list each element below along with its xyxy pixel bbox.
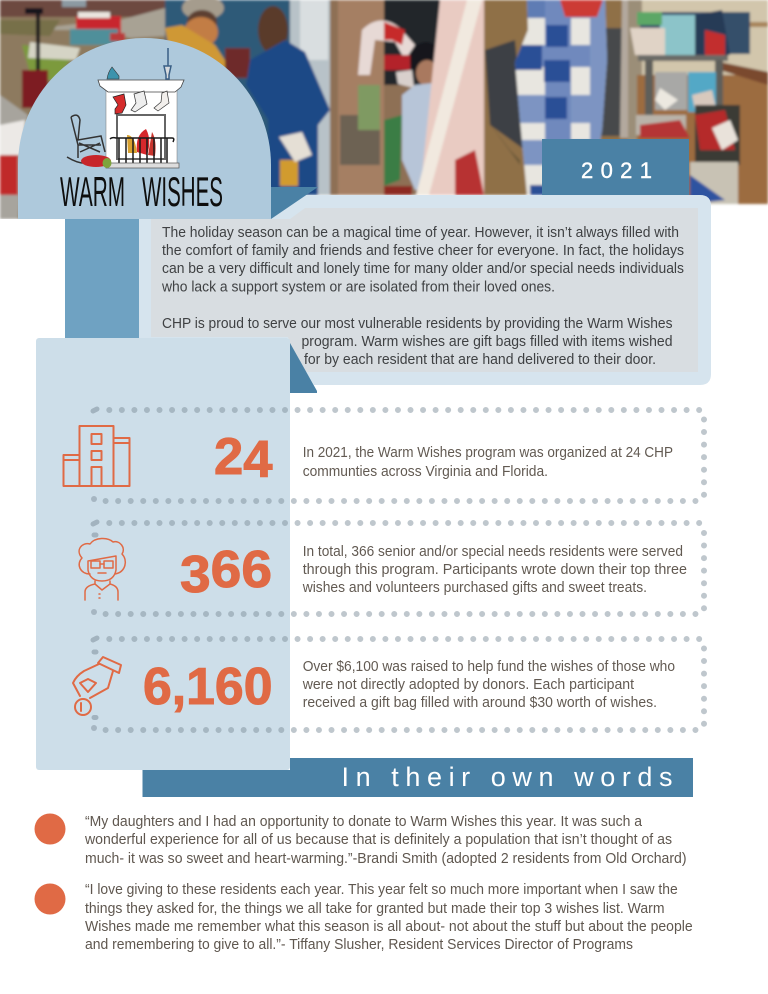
- number: 366: 66: [211, 541, 272, 599]
- text: intro paragraphs: program. Warm wishes are gift bags filled with items wished: [302, 334, 672, 350]
- panel: logo arch: [18, 38, 271, 219]
- quote: Tiffany Slusher: [34, 882, 693, 953]
- fold: top blue corner: [271, 187, 318, 219]
- icon: senior resident: [79, 538, 125, 600]
- stat row: funds raised: [73, 638, 704, 731]
- panel: intro callout background: [139, 195, 711, 385]
- text: funds description: received a gift bag filled with around $30 worth of wishes.: [303, 695, 657, 711]
- icon: buildings: [64, 426, 130, 486]
- icon: hand dropping coin: [73, 657, 121, 715]
- quote text: [85, 882, 693, 953]
- text: residents description: [302, 544, 687, 596]
- logo: fireplace illustration: [67, 48, 184, 168]
- text: residents description: through this program. Participants wrote down their top three: [303, 562, 687, 578]
- heading band: In their own words: [142, 758, 693, 797]
- wrapped gift: [81, 155, 112, 168]
- photo: plaid sock in box: [484, 0, 628, 197]
- quote text: Wishes made me remember what this season is all about- not about the stuff but about the people: [85, 919, 693, 935]
- fire grate: [110, 138, 174, 164]
- panel: blue side block: [65, 219, 139, 339]
- quote text: much- it was so sweet and heart-warming.”-Brandi Smith (adopted 2 residents from Old Orchard): [85, 851, 686, 867]
- text: funds description: were not directly adopted by donors. Each participant: [302, 677, 634, 693]
- quote text: “I love giving to these residents each year. This year felt so much more important when I saw the: [85, 882, 678, 898]
- quote text: [84, 814, 686, 867]
- quote text: and remembering to give to all.”- Tiffany Slusher, Resident Services Director of Programs: [85, 937, 633, 953]
- number: 24: 2: [214, 428, 243, 486]
- text: intro paragraphs: for by each resident that are hand delivered to their door.: [304, 352, 656, 368]
- text: intro paragraphs: who lack a support system or are isolated from their loved ones.: [161, 280, 555, 296]
- badge: year 2021: 2021: [581, 158, 652, 183]
- panel: intro inner grey box: [151, 208, 698, 372]
- number: 366: 3: [180, 546, 211, 604]
- number: 6,160: 6,160: [143, 658, 272, 716]
- stat row: residents: [79, 522, 704, 615]
- hearth base: [106, 163, 179, 168]
- text: funds description: [302, 659, 675, 711]
- text: funds description: Over $6,100 was raised to help fund the wishes of those who: [303, 659, 675, 675]
- heading band: In their own words: In their own words: [342, 762, 672, 792]
- dotted frame: [91, 409, 704, 502]
- text: WISHES: [142, 168, 223, 215]
- text: intro paragraphs: can be a very difficult and lonely time for many older and/or special needs individuals: [162, 261, 684, 277]
- number: 24: 4: [243, 431, 273, 489]
- dotted frame: [91, 638, 704, 731]
- text: intro paragraphs: CHP is proud to serve our most vulnerable residents by providing the Warm Wishes: [162, 316, 672, 332]
- text: intro paragraphs: the comfort of family and friends and festive cheer for everyone. In fact, the holidays: [162, 243, 684, 259]
- text: residents description: In total, 366 senior and/or special needs residents were served: [303, 544, 683, 560]
- photo: yard and residents at door: [0, 0, 338, 219]
- dotted frame: [91, 522, 704, 615]
- text: communities description: [303, 445, 673, 480]
- stockings: [113, 91, 169, 114]
- badge: year 2021: [542, 139, 689, 195]
- stat row: communities: [64, 409, 704, 502]
- photo: table of gift bags: [628, 0, 768, 204]
- candle: [164, 48, 171, 79]
- quote text: wonderful experience for all of us because that is definitely a population that isn’t thought of as: [84, 832, 672, 848]
- quote: Brandi Smith: [34, 814, 686, 867]
- text: communities description: communties across Virginia and Florida.: [303, 464, 548, 480]
- hearth frame: [117, 115, 165, 159]
- text: communities description: In 2021, the Warm Wishes program was organized at 24 CHP: [303, 445, 673, 461]
- flames: [127, 129, 156, 156]
- bullet: [34, 884, 66, 914]
- rocking chair: [67, 115, 105, 163]
- text: residents description: wishes and volunteers purchased gifts and sweet treats.: [302, 580, 647, 596]
- fireplace body: [106, 84, 177, 166]
- photo strip: [0, 0, 768, 219]
- fold: lower blue corner: [290, 343, 317, 393]
- logo: Warm Wishes wordmark: WARM: [60, 168, 125, 215]
- bullet: [34, 814, 66, 844]
- quote text: “My daughters and I had an opportunity to donate to Warm Wishes this year. It was such a: [85, 814, 643, 830]
- quote text: things they asked for, the things we all take for granted but made their top 3 wishes list. Warm: [85, 901, 664, 917]
- photo: woman with gift bag: [330, 0, 484, 195]
- text: intro paragraphs: [161, 225, 684, 368]
- text: intro paragraphs: The holiday season can be a magical time of year. However, it isn’t always filled with: [162, 225, 679, 241]
- blue ornament: [107, 67, 119, 79]
- mantel: [98, 80, 184, 92]
- panel: light blue stats column: [36, 338, 290, 770]
